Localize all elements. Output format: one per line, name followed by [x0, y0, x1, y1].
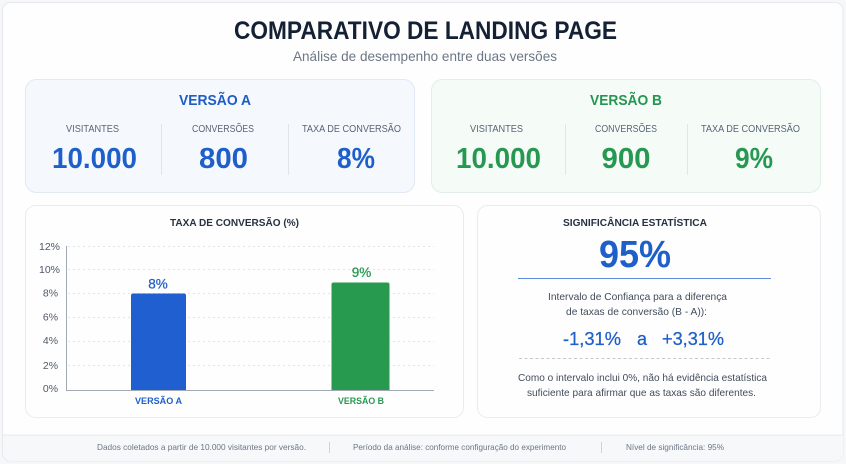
metric: conversion rate A: 8%: [337, 143, 375, 175]
confidence interval values: -1,31%: [563, 329, 621, 349]
metric: conversion rate B: [701, 122, 800, 175]
metric: conversion rate A: [302, 122, 401, 175]
conclusion text: [518, 372, 767, 399]
y axis labels: 2%: [43, 360, 58, 372]
y axis labels: 6%: [43, 312, 58, 324]
metric: conversions B: 900: [602, 143, 650, 175]
panel: bar chart: [26, 206, 464, 418]
big number: 95%: [599, 234, 671, 276]
metric: conversion rate A: TAXA DE CONVERSÃO: [302, 122, 401, 135]
confidence interval text: de taxas de conversão (B - A)):: [566, 306, 707, 318]
metric: visitors A: 10.000: [52, 143, 137, 175]
y axis labels: 10%: [39, 264, 60, 276]
metric: conversions A: [192, 122, 254, 175]
conclusion text: suficiente para afirmar que as taxas são diferentes.: [527, 387, 756, 399]
metric: visitors B: VISITANTES: [470, 124, 523, 135]
y axis labels: 12%: [39, 241, 60, 253]
axes: [66, 246, 434, 390]
metric: visitors A: [52, 124, 137, 175]
value label B: 9%: [352, 265, 371, 280]
metric: conversions A: CONVERSÕES: [192, 122, 254, 135]
bar: version A: [131, 294, 186, 390]
chart title: TAXA DE CONVERSÃO (%): [170, 216, 299, 229]
heading: version B: VERSÃO B: [590, 91, 662, 109]
metric: conversions B: CONVERSÕES: [595, 122, 657, 135]
metric: conversion rate B: 9%: [735, 143, 773, 175]
confidence interval values: [563, 329, 724, 349]
title: COMPARATIVO DE LANDING PAGE: [234, 17, 617, 45]
footer note: data: Dados coletados a partir de 10.000 visitantes por versão.: [97, 442, 306, 452]
confidence interval text: Intervalo de Confiança para a diferença: [548, 291, 727, 303]
panel: version A: [26, 80, 414, 192]
metric: conversions A: 800: [199, 143, 248, 175]
confidence interval values: +3,31%: [662, 329, 724, 349]
y axis labels: [39, 241, 60, 395]
conclusion text: Como o intervalo inclui 0%, não há evidência estatística: [518, 372, 767, 384]
footer: [3, 435, 843, 461]
metric: visitors A: VISITANTES: [66, 124, 119, 135]
heading: version A: VERSÃO A: [179, 91, 251, 109]
metric: visitors B: [456, 124, 541, 175]
category label B: VERSÃO B: [338, 396, 384, 407]
y axis labels: 0%: [43, 383, 58, 395]
footer note: significance level: Nível de significância: 95%: [626, 442, 724, 452]
bar: version B: [332, 282, 390, 390]
y axis labels: 4%: [43, 335, 58, 347]
category label A: VERSÃO A: [135, 396, 182, 407]
panel: statistical significance: [478, 206, 820, 418]
panel: version B: [432, 80, 820, 192]
heading: SIGNIFICÂNCIA ESTATÍSTICA: [563, 216, 707, 229]
metric: conversion rate B: TAXA DE CONVERSÃO: [701, 122, 800, 135]
y axis labels: 8%: [43, 288, 58, 300]
subtitle: Análise de desempenho entre duas versões: [293, 48, 557, 64]
confidence interval text: [548, 291, 727, 318]
confidence interval values: a: [637, 329, 648, 349]
value label A: 8%: [148, 276, 168, 292]
metric: conversions B: [595, 122, 657, 175]
footer note: period: Período da análise: conforme configuração do experimento: [353, 442, 566, 452]
metric: visitors B: 10.000: [456, 143, 541, 175]
